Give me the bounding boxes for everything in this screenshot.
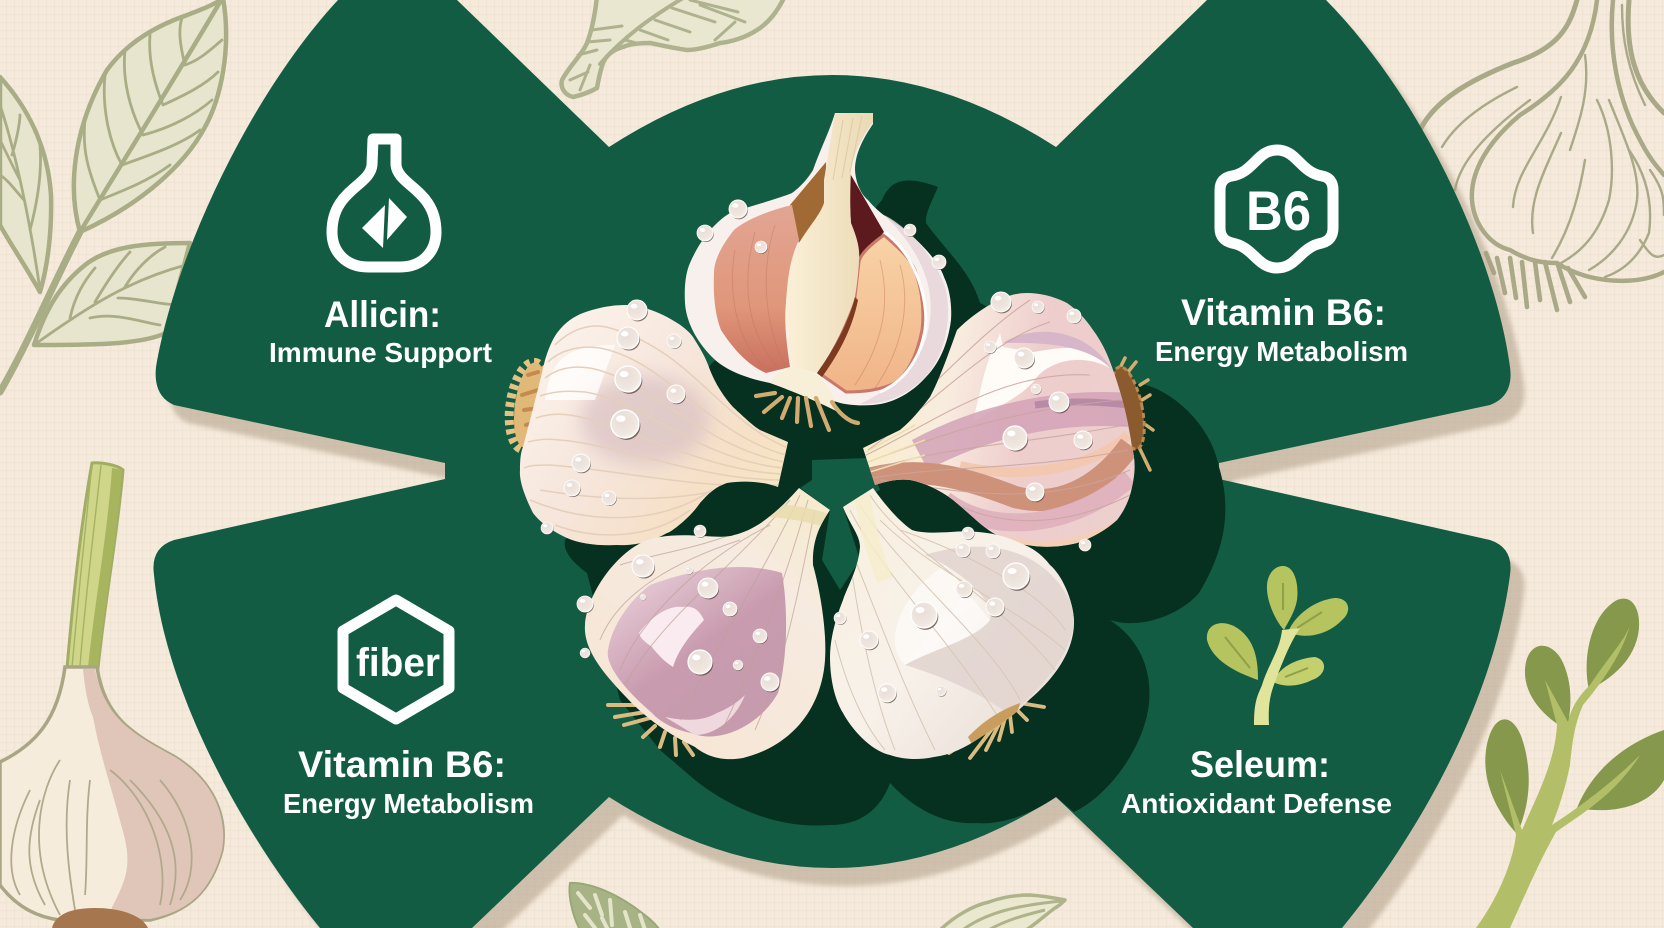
illustration: bottom-centre left leaf	[569, 883, 661, 928]
clove droplets	[577, 525, 780, 692]
illustration: top-left leaf branch	[0, 0, 226, 392]
clove body	[830, 488, 1074, 759]
garlic root base	[52, 908, 148, 928]
icon: B6 badge: B6	[1246, 179, 1311, 242]
clove base	[770, 367, 838, 412]
sprig leaves	[1485, 599, 1664, 834]
clove: cut garlic clove, top	[685, 113, 951, 430]
central cream clove	[786, 113, 873, 373]
text: Selenium antioxidant defense	[1121, 744, 1392, 819]
clove droplets	[834, 527, 1030, 703]
root disc	[504, 360, 554, 452]
text: Vitamin B6 energy metabolism, top right: Energy Metabolism	[1155, 336, 1408, 367]
text: Selenium antioxidant defense: Antioxidant Defense	[1121, 788, 1392, 819]
text: Allicin	[269, 294, 492, 368]
text: Vitamin B6 energy metabolism, bottom left: Energy Metabolism	[283, 788, 534, 819]
illustration: bottom-left garlic	[0, 463, 223, 928]
text: Vitamin B6 energy metabolism, top right	[1155, 292, 1408, 367]
maroon interior	[848, 170, 884, 262]
brown interior	[790, 162, 826, 243]
clove body	[585, 488, 830, 759]
illustration: bottom-centre right leaf	[938, 895, 1065, 928]
clove body	[863, 293, 1135, 547]
sprig stem	[1476, 625, 1640, 928]
clove: whole garlic, bottom right	[830, 488, 1074, 759]
clove: whole garlic, right	[863, 292, 1153, 552]
central green gap between cloves	[800, 458, 880, 590]
clove roots	[949, 703, 1044, 758]
text: Vitamin B6 energy metabolism, bottom left: Vitamin B6:	[298, 744, 506, 785]
garlic green stem	[67, 463, 123, 668]
icon: allicin flask	[332, 139, 436, 267]
icon: B6 badge	[1220, 150, 1333, 268]
icon: fiber hexagon	[343, 600, 449, 719]
text: Selenium antioxidant defense: Seleum:	[1190, 744, 1330, 785]
illustration: top small leaf	[562, 0, 785, 97]
dark shadow under garlic cloves	[565, 181, 1225, 826]
text: Allicin: Immune Support	[269, 337, 492, 368]
clove droplets	[984, 292, 1093, 552]
illustration: bottom-right sprig	[1476, 599, 1664, 928]
outer white shell	[685, 113, 951, 405]
text: Vitamin B6 energy metabolism, top right: Vitamin B6:	[1181, 292, 1386, 333]
clove droplets	[697, 200, 947, 270]
root disc	[1106, 358, 1153, 470]
illustration: top-right garlic outline	[1420, 0, 1664, 310]
right peach lobe	[819, 235, 923, 392]
clove: whole garlic, bottom left	[577, 488, 830, 759]
left pink lobe	[714, 205, 799, 373]
panel shadow	[167, 18, 1525, 928]
icon: fiber hexagon: fiber	[356, 641, 440, 685]
clove body	[520, 305, 788, 545]
icon: selenium sprout	[1207, 566, 1348, 725]
clove roots	[608, 705, 693, 755]
clove: whole garlic, left	[504, 300, 788, 545]
text: Allicin: Allicin:	[324, 294, 441, 335]
clove roots	[756, 393, 858, 430]
text: Vitamin B6 energy metabolism, bottom left	[283, 744, 534, 819]
clove droplets	[541, 300, 686, 535]
